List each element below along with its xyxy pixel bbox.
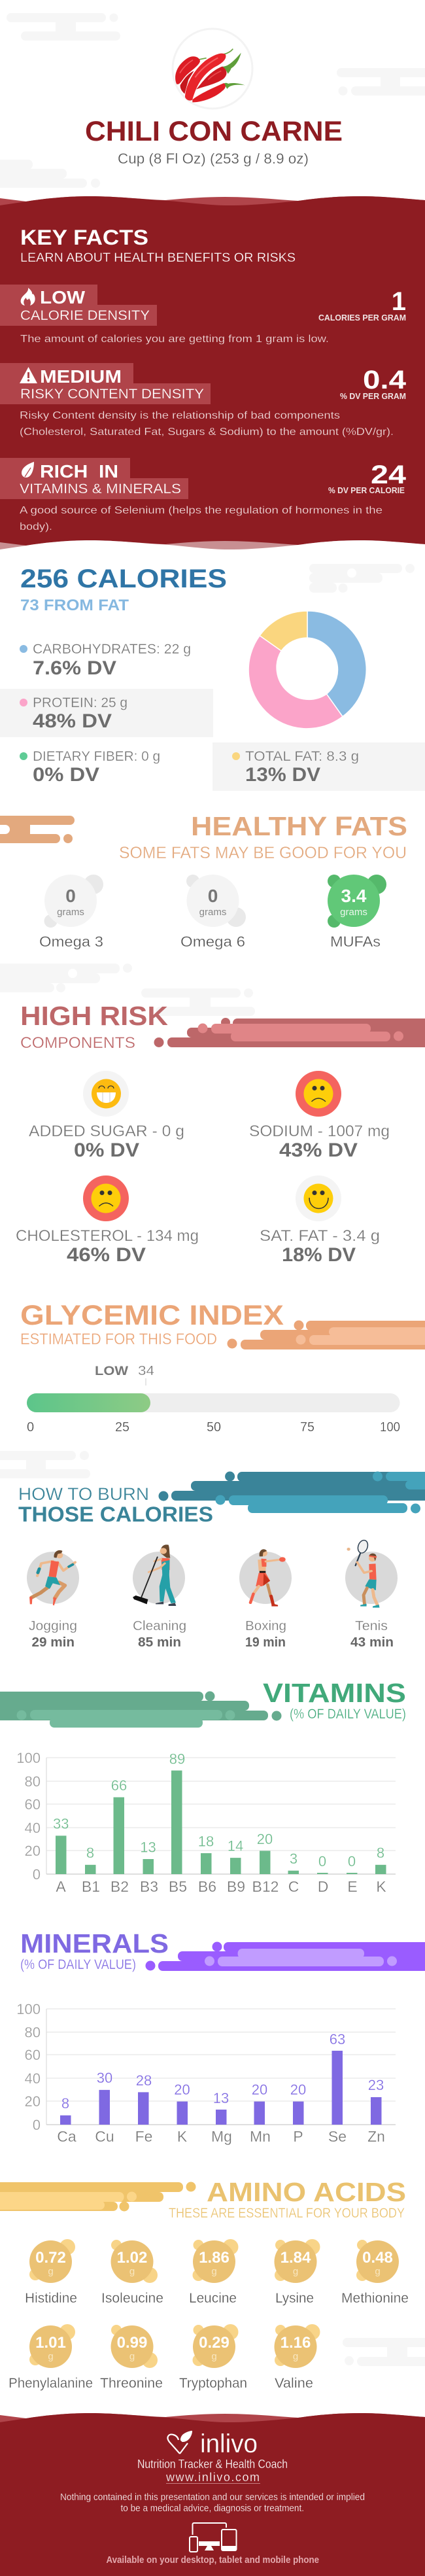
risk: saturated fat <box>260 1175 380 1266</box>
chart: vitamins bar chart: 0 <box>318 1853 326 1870</box>
heading: those calories: THOSE CALORIES <box>18 1503 213 1526</box>
chart: minerals bar chart: 100 <box>16 2001 41 2017</box>
macro: dietary fiber <box>20 749 160 786</box>
fat: omega 6: 0 <box>208 886 218 906</box>
icon: flame <box>21 288 35 305</box>
risk: saturated fat: SAT. FAT - 3.4 g <box>260 1227 380 1245</box>
chart: glycemic index gauge: 0 <box>27 1420 34 1435</box>
amino acid: methionine: Methionine <box>341 2291 409 2306</box>
icon: smiling face <box>303 1184 333 1213</box>
chart: minerals bar chart: Cu <box>95 2128 114 2145</box>
fact: medium risky content density: % DV PER GRAM <box>340 391 406 401</box>
heading: how to burn: HOW TO BURN <box>18 1484 149 1504</box>
website link: www.inlivo.com <box>165 2471 260 2484</box>
chart: minerals bar chart: Zn <box>367 2128 385 2145</box>
fact: low calorie density: CALORIES PER GRAM <box>318 313 406 322</box>
icon: inlivo heart logo <box>168 2431 192 2454</box>
chart: minerals bar chart: 23 <box>368 2077 384 2093</box>
chart: vitamins bar chart: 20 <box>25 1843 41 1859</box>
amino acid: isoleucine <box>101 2240 163 2306</box>
activity: jogging: Jogging <box>29 1619 77 1633</box>
chart: glycemic index gauge: 75 <box>300 1420 314 1435</box>
amino acid: lysine: Lysine <box>275 2291 314 2306</box>
disclaimer: to be a medical advice, diagnosis or treatment. <box>120 2503 304 2514</box>
chart: vitamins bar chart: 89 <box>169 1750 185 1767</box>
chart: minerals bar chart: 0 <box>33 2117 41 2133</box>
macro: total fat: 13% DV <box>245 764 320 786</box>
disclaimer <box>60 2492 365 2514</box>
amino acid: valine: 1.16 <box>280 2334 311 2352</box>
amino acid: isoleucine: g <box>129 2266 135 2277</box>
activity: cleaning: Cleaning <box>133 1619 186 1633</box>
fat: omega 6: grams <box>199 907 226 918</box>
heading: key facts: KEY FACTS <box>20 226 148 249</box>
icon: desktop, tablet and phone <box>190 2523 237 2552</box>
amino acid: phenylalanine: 1.01 <box>35 2334 66 2352</box>
risk: sodium <box>249 1071 390 1161</box>
chart: vitamins bar chart: C <box>288 1878 299 1895</box>
amino acid: tryptophan: g <box>211 2351 217 2362</box>
activity: tennis: Tenis <box>355 1619 388 1633</box>
macro: protein: PROTEIN: 25 g <box>33 695 128 710</box>
fact: rich in vitamins and minerals: 24 <box>371 461 407 489</box>
heading: high risk: HIGH RISK <box>20 1001 168 1031</box>
activity: jogging <box>27 1550 79 1650</box>
fat: omega 6 <box>180 875 246 950</box>
activity: cleaning: 85 min <box>138 1635 181 1650</box>
amino acid: phenylalanine: Phenylalanine <box>8 2376 93 2391</box>
subheading: healthy fats: SOME FATS MAY BE GOOD FOR YOU <box>119 844 407 862</box>
chart: minerals bar chart: P <box>293 2128 303 2145</box>
fact: medium risky content density: (Cholesterol, Saturated Fat, Sugars & Sodium) to the amount (%DV/gr). <box>20 426 394 438</box>
icon: chili peppers <box>173 29 252 109</box>
chart: glycemic index gauge: 34 <box>138 1364 154 1378</box>
chart: vitamins bar chart: 18 <box>198 1833 214 1850</box>
title: CHILI CON CARNE <box>85 116 343 147</box>
chart: vitamins bar chart: D <box>318 1878 328 1895</box>
heading: healthy fats: HEALTHY FATS <box>191 811 407 841</box>
activity: boxing <box>239 1549 292 1650</box>
fat: MUFAs: 3.4 <box>341 886 367 906</box>
chart: vitamins bar chart: 60 <box>25 1796 41 1813</box>
chart: vitamins bar chart: B3 <box>140 1878 158 1895</box>
chart: vitamins bar chart: 13 <box>140 1839 156 1855</box>
decoration: amino acids blob <box>0 2182 196 2211</box>
amino acid: histidine: Histidine <box>25 2291 77 2306</box>
macro: total fat: TOTAL FAT: 8.3 g <box>245 749 359 764</box>
panel: footer <box>0 2413 425 2576</box>
icon: warning triangle <box>20 367 37 383</box>
chart: minerals bar chart <box>16 2001 396 2145</box>
risk: cholesterol: CHOLESTEROL - 134 mg <box>16 1227 199 1245</box>
chart: vitamins bar chart: 100 <box>16 1750 41 1766</box>
chart: vitamins bar chart: A <box>56 1878 66 1895</box>
macro: protein: 48% DV <box>33 710 112 732</box>
risk: sodium: SODIUM - 1007 mg <box>249 1123 390 1140</box>
logo wordmark: inlivo <box>200 2429 258 2458</box>
fact: medium risky content density: MEDIUM <box>40 366 122 387</box>
macro: dietary fiber: DIETARY FIBER: 0 g <box>33 749 160 764</box>
chart: vitamins bar chart: 66 <box>111 1777 127 1794</box>
fact: medium risky content density: Risky Content density is the relationship of bad components <box>20 410 340 421</box>
macro: dietary fiber: 0% DV <box>33 764 99 786</box>
fat: omega 3: grams <box>57 907 84 918</box>
heading: minerals: MINERALS <box>20 1928 169 1958</box>
activity: tennis: 43 min <box>350 1635 394 1650</box>
chart: glycemic index gauge: 100 <box>380 1420 400 1435</box>
icon: grinning face <box>92 1079 121 1108</box>
amino acid: methionine: 0.48 <box>362 2249 393 2267</box>
amino acid: tryptophan: 0.29 <box>199 2334 230 2352</box>
heading: calories: 256 CALORIES <box>20 565 227 593</box>
fat: MUFAs: MUFAs <box>330 933 381 950</box>
chart: minerals bar chart: 20 <box>174 2081 190 2098</box>
macro: protein <box>0 689 213 737</box>
fact: rich in vitamins and minerals: VITAMINS & MINERALS <box>20 481 181 496</box>
amino acid: threonine <box>100 2325 163 2391</box>
fact: low calorie density: CALORIE DENSITY <box>20 308 150 323</box>
decoration: glycemic blob <box>228 1320 425 1349</box>
risk: added sugar: 0% DV <box>74 1140 139 1161</box>
heading: amino acids: AMINO ACIDS <box>207 2177 406 2207</box>
chart: vitamins bar chart: 0 <box>348 1853 356 1870</box>
chart: vitamins bar chart: 33 <box>53 1816 69 1832</box>
amino acid: threonine: 0.99 <box>117 2334 147 2352</box>
amino acid: leucine <box>189 2239 238 2306</box>
macro: carbohydrates: CARBOHYDRATES: 22 g <box>33 642 191 657</box>
amino acid: phenylalanine <box>8 2324 93 2391</box>
amino acid: methionine: g <box>375 2266 381 2277</box>
amino acid: histidine <box>25 2239 77 2306</box>
chart: vitamins bar chart: E <box>347 1878 358 1895</box>
icon: leaf <box>22 462 34 478</box>
chart: minerals bar chart: 80 <box>25 2024 41 2041</box>
macro: carbohydrates <box>20 642 191 679</box>
chart: minerals bar chart: Ca <box>57 2128 76 2145</box>
chart: minerals bar chart: 8 <box>61 2095 69 2112</box>
availability note: Available on your desktop, tablet and mobile phone <box>106 2554 319 2566</box>
chart: vitamins bar chart: 40 <box>25 1820 41 1836</box>
fat: omega 3: Omega 3 <box>39 933 103 950</box>
chart: minerals bar chart: 30 <box>97 2070 112 2086</box>
chart: glycemic index gauge: 25 <box>115 1420 129 1435</box>
decoration: healthy fats blob <box>0 816 75 843</box>
activity: boxing: Boxing <box>245 1619 286 1633</box>
fact: low calorie density: 1 <box>392 287 406 316</box>
heading: glycemic index: GLYCEMIC INDEX <box>20 1300 284 1331</box>
amino acid: valine: g <box>293 2351 298 2362</box>
amino acid: histidine: g <box>48 2266 54 2277</box>
subheading: LEARN ABOUT HEALTH BENEFITS OR RISKS <box>20 251 296 265</box>
subtitle: serving size: Cup (8 Fl Oz) (253 g / 8.9 oz) <box>118 150 309 167</box>
activity: jogging: 29 min <box>31 1635 75 1650</box>
amino acid: lysine: 1.84 <box>280 2249 311 2267</box>
macro: carbohydrates: 7.6% DV <box>33 657 116 679</box>
icon: person sweeping <box>133 1544 176 1606</box>
chart: vitamins bar chart: B2 <box>110 1878 129 1895</box>
chart: vitamins bar chart: B6 <box>198 1878 216 1895</box>
tagline: Nutrition Tracker & Health Coach <box>137 2458 288 2471</box>
fat: MUFAs: grams <box>340 907 367 918</box>
risk: added sugar: ADDED SUGAR - 0 g <box>29 1123 184 1140</box>
amino acid: tryptophan <box>179 2324 247 2391</box>
chart: vitamins bar chart: K <box>376 1878 386 1895</box>
fact: medium risky content density: 0.4 <box>363 366 407 394</box>
amino acid: isoleucine: 1.02 <box>117 2249 147 2267</box>
chart: minerals bar chart: 20 <box>290 2081 306 2098</box>
amino acid: lysine <box>275 2239 320 2306</box>
chart: minerals bar chart: 28 <box>136 2072 152 2089</box>
fact: low calorie density: LOW <box>40 287 86 307</box>
icon: boxer <box>250 1549 286 1607</box>
fact: low calorie density <box>0 285 406 345</box>
chart: minerals bar chart: 20 <box>252 2081 267 2098</box>
activity: cleaning <box>133 1544 186 1650</box>
panel: key facts <box>0 196 425 560</box>
fat: MUFAs <box>328 875 386 950</box>
activity: tennis <box>345 1539 398 1650</box>
chart: minerals bar chart: Mn <box>250 2128 271 2145</box>
icon: tennis player <box>347 1539 380 1608</box>
chart: minerals bar chart: K <box>177 2128 188 2145</box>
amino acid: leucine: 1.86 <box>199 2249 230 2267</box>
amino acid: tryptophan: Tryptophan <box>179 2376 247 2391</box>
subheading: vitamins: (% OF DAILY VALUE) <box>290 1707 406 1722</box>
disclaimer: Nothing contained in this presentation and our services is intended or implied <box>60 2492 365 2503</box>
decoration: high risk blob <box>154 1018 425 1047</box>
chart: glycemic index gauge <box>27 1364 400 1435</box>
amino acid: valine <box>275 2324 320 2391</box>
chart: glycemic index gauge: LOW <box>95 1365 128 1378</box>
fact: low calorie density: The amount of calories you are getting from 1 gram is low. <box>20 334 329 345</box>
fact: rich in vitamins and minerals: A good source of Selenium (helps the regulation of hormones in the <box>20 505 382 516</box>
decoration: burn blob <box>158 1472 425 1514</box>
fat: omega 3: 0 <box>65 886 76 906</box>
amino acid: threonine: Threonine <box>100 2376 163 2391</box>
chart: minerals bar chart: 63 <box>330 2031 345 2047</box>
fact: rich in vitamins and minerals: RICH IN <box>40 461 118 481</box>
risk: sodium: 43% DV <box>279 1140 358 1161</box>
amino acid: leucine: g <box>211 2266 217 2277</box>
amino acid: valine: Valine <box>275 2376 313 2391</box>
amino acid: threonine: g <box>129 2351 135 2362</box>
risk: cholesterol <box>16 1175 199 1266</box>
subheading: glycemic index: ESTIMATED FOR THIS FOOD <box>20 1331 217 1348</box>
chart: vitamins bar chart: 8 <box>377 1845 384 1861</box>
risk: saturated fat: 18% DV <box>282 1244 356 1266</box>
chart: vitamins bar chart: 80 <box>25 1773 41 1790</box>
chart: minerals bar chart: 40 <box>25 2070 41 2087</box>
risk: added sugar <box>29 1071 184 1161</box>
chart: vitamins bar chart: 20 <box>257 1831 273 1847</box>
icon: sad face <box>92 1184 120 1213</box>
fact: medium risky content density <box>0 363 407 438</box>
amino acid: isoleucine: Isoleucine <box>101 2291 163 2306</box>
chart: vitamins bar chart: 8 <box>86 1845 94 1861</box>
chart: minerals bar chart: 20 <box>25 2093 41 2110</box>
chart: minerals bar chart: 60 <box>25 2047 41 2063</box>
amino acid: histidine: 0.72 <box>35 2249 66 2267</box>
icon: jogger <box>29 1550 75 1605</box>
fact: rich in vitamins and minerals: % DV PER CALORIE <box>328 485 405 495</box>
subheading: minerals: (% OF DAILY VALUE) <box>20 1957 136 1972</box>
decoration: vitamins blob <box>0 1692 281 1728</box>
chart: vitamins bar chart: B1 <box>82 1878 100 1895</box>
chart: minerals bar chart: 13 <box>213 2090 229 2106</box>
chart: vitamins bar chart: 14 <box>228 1838 243 1854</box>
chart: minerals bar chart: Mg <box>211 2128 232 2145</box>
chart: minerals bar chart: Se <box>328 2128 347 2145</box>
icon: sad face <box>303 1079 333 1108</box>
chart: vitamins bar chart: 0 <box>33 1866 41 1883</box>
chart: glycemic index gauge: 50 <box>207 1420 221 1435</box>
macro: total fat <box>212 742 425 791</box>
chart: macronutrient donut <box>248 611 366 729</box>
heading: vitamins: VITAMINS <box>263 1678 406 1708</box>
chart: minerals bar chart: Fe <box>135 2128 152 2145</box>
chart: vitamins bar chart <box>16 1750 396 1895</box>
amino acid: leucine: Leucine <box>189 2291 237 2306</box>
fat: omega 6: Omega 6 <box>180 933 245 950</box>
decoration: minerals blob <box>145 1941 425 1971</box>
chart: vitamins bar chart: B12 <box>252 1878 279 1895</box>
chart: vitamins bar chart: B5 <box>169 1878 187 1895</box>
activity: boxing: 19 min <box>245 1635 286 1650</box>
risk: cholesterol: 46% DV <box>67 1244 146 1266</box>
amino acid: lysine: g <box>293 2266 298 2277</box>
fact: rich in vitamins and minerals: body). <box>20 521 52 532</box>
fact: medium risky content density: RISKY CONTENT DENSITY <box>20 387 204 402</box>
fact: rich in vitamins and minerals <box>0 458 407 532</box>
subheading: components: COMPONENTS <box>20 1034 135 1052</box>
fat: omega 3 <box>39 875 103 950</box>
chart: vitamins bar chart: B9 <box>227 1878 245 1895</box>
amino acid: methionine <box>341 2240 409 2306</box>
chart: vitamins bar chart: 3 <box>290 1851 298 1867</box>
subheading: from fat: 73 FROM FAT <box>20 597 129 614</box>
amino acid: phenylalanine: g <box>48 2351 54 2362</box>
